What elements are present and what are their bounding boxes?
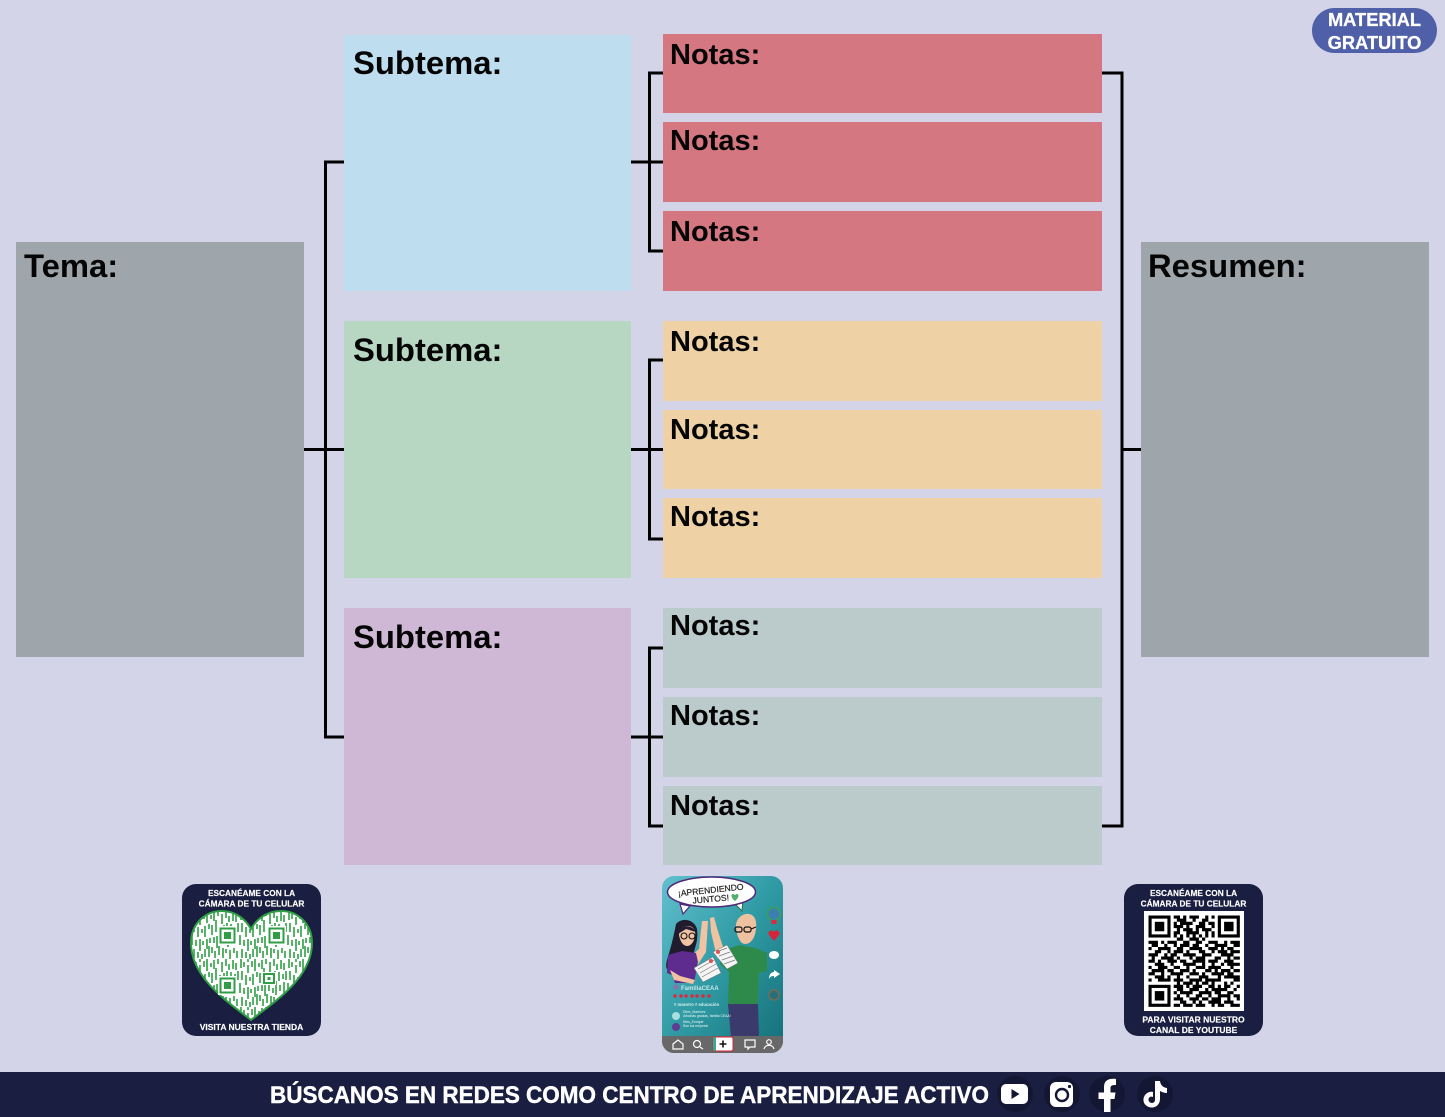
comments: Mtro_Enrique bbox=[683, 1020, 703, 1024]
card: QR tienda bbox=[182, 884, 321, 1036]
panel: notas 3-3: Notas: bbox=[670, 790, 760, 822]
speech bubble bbox=[668, 877, 756, 914]
panel: notas 3-1 bbox=[663, 608, 1102, 688]
rating stars bbox=[673, 994, 711, 998]
illustration: phone screen with teachers bbox=[662, 876, 783, 1053]
caption: escanéame tienda: ESCANÉAME CON LA bbox=[208, 888, 295, 898]
panel: subtema 3: Subtema: bbox=[353, 618, 502, 654]
heart QR code bbox=[190, 910, 313, 1021]
icon: profile dot bbox=[674, 984, 678, 990]
panel: subtema 2 bbox=[344, 321, 631, 578]
icon: facebook bbox=[1089, 1076, 1125, 1112]
badge: material gratuito: GRATUITO bbox=[1328, 32, 1421, 52]
panel: notas 2-3: Notas: bbox=[670, 500, 760, 532]
panel: subtema 3 bbox=[344, 608, 631, 865]
icon: youtube bbox=[997, 1076, 1033, 1112]
comments: Son los mejores! bbox=[683, 1024, 708, 1028]
panel: subtema 1: Subtema: bbox=[353, 44, 502, 80]
panel: notas 2-1 bbox=[663, 321, 1102, 401]
panel: notas 2-2 bbox=[663, 410, 1102, 489]
speech bubble: ¡APRENDIENDO bbox=[677, 882, 744, 898]
panel: notas 2-1: Notas: bbox=[670, 326, 760, 358]
badge: material gratuito: MATERIAL bbox=[1328, 9, 1421, 30]
figure: woman bbox=[666, 920, 708, 984]
panel: notas 1-3 bbox=[663, 211, 1102, 291]
panel: notas 3-1: Notas: bbox=[670, 610, 760, 642]
caption: para visitar nuestro canal: PARA VISITAR NUESTRO bbox=[1142, 1014, 1245, 1024]
figure: man bbox=[710, 914, 767, 1037]
panel: tema bbox=[16, 242, 304, 657]
comments: ¡Muchas gracias, familia CEAA! bbox=[683, 1014, 731, 1018]
icon: sheets of paper bbox=[694, 945, 738, 982]
panel: tema: Tema: bbox=[24, 246, 118, 284]
panel: resumen: Resumen: bbox=[1148, 246, 1307, 284]
speech bubble: JUNTOS! bbox=[692, 892, 729, 906]
side icons bbox=[768, 908, 780, 1000]
panel: notas 1-1 bbox=[663, 34, 1102, 113]
caption: escanéame youtube: CÁMARA DE TU CELULAR bbox=[1141, 898, 1246, 908]
panel: notas 1-3: Notas: bbox=[670, 216, 760, 248]
text: familia: FamiliaCEAA bbox=[681, 986, 719, 992]
caption: escanéame youtube: ESCANÉAME CON LA bbox=[1150, 888, 1237, 898]
panel: notas 3-2: Notas: bbox=[670, 700, 760, 732]
panel: subtema 2: Subtema: bbox=[353, 330, 502, 368]
QR code bbox=[1144, 911, 1244, 1011]
icon: tiktok bbox=[1137, 1076, 1173, 1112]
comments: Dilce_Martínez bbox=[683, 1010, 706, 1014]
bottom nav bar bbox=[662, 1036, 783, 1053]
caption: para visitar nuestro canal bbox=[1142, 1014, 1245, 1035]
comments bbox=[672, 1010, 731, 1031]
text: hashtags: # maestro # educación bbox=[674, 1002, 720, 1007]
panel: resumen bbox=[1141, 242, 1429, 657]
panel: notas 2-2: Notas: bbox=[670, 414, 760, 446]
panel: notas 1-2: Notas: bbox=[670, 124, 760, 156]
badge: material gratuito bbox=[1312, 8, 1437, 53]
panel: notas 3-2 bbox=[663, 697, 1102, 777]
footer bar bbox=[0, 1072, 1445, 1117]
caption: visita nuestra tienda: VISITA NUESTRA TIENDA bbox=[200, 1022, 303, 1032]
icon: instagram bbox=[1044, 1076, 1080, 1112]
caption: para visitar nuestro canal: CANAL DE YOUTUBE bbox=[1150, 1025, 1238, 1035]
card: QR youtube bbox=[1124, 884, 1263, 1036]
panel: notas 1-2 bbox=[663, 122, 1102, 202]
caption: escanéame tienda bbox=[199, 888, 304, 908]
panel: notas 2-3 bbox=[663, 498, 1102, 578]
caption: escanéame tienda: CÁMARA DE TU CELULAR bbox=[199, 898, 304, 908]
panel: subtema 1 bbox=[344, 35, 631, 291]
footer text: BÚSCANOS EN REDES COMO CENTRO DE APRENDIZAJE ACTIVO bbox=[270, 1081, 989, 1109]
caption: escanéame youtube bbox=[1141, 888, 1246, 908]
panel: notas 1-1: Notas: bbox=[670, 38, 760, 70]
panel: notas 3-3 bbox=[663, 786, 1102, 865]
